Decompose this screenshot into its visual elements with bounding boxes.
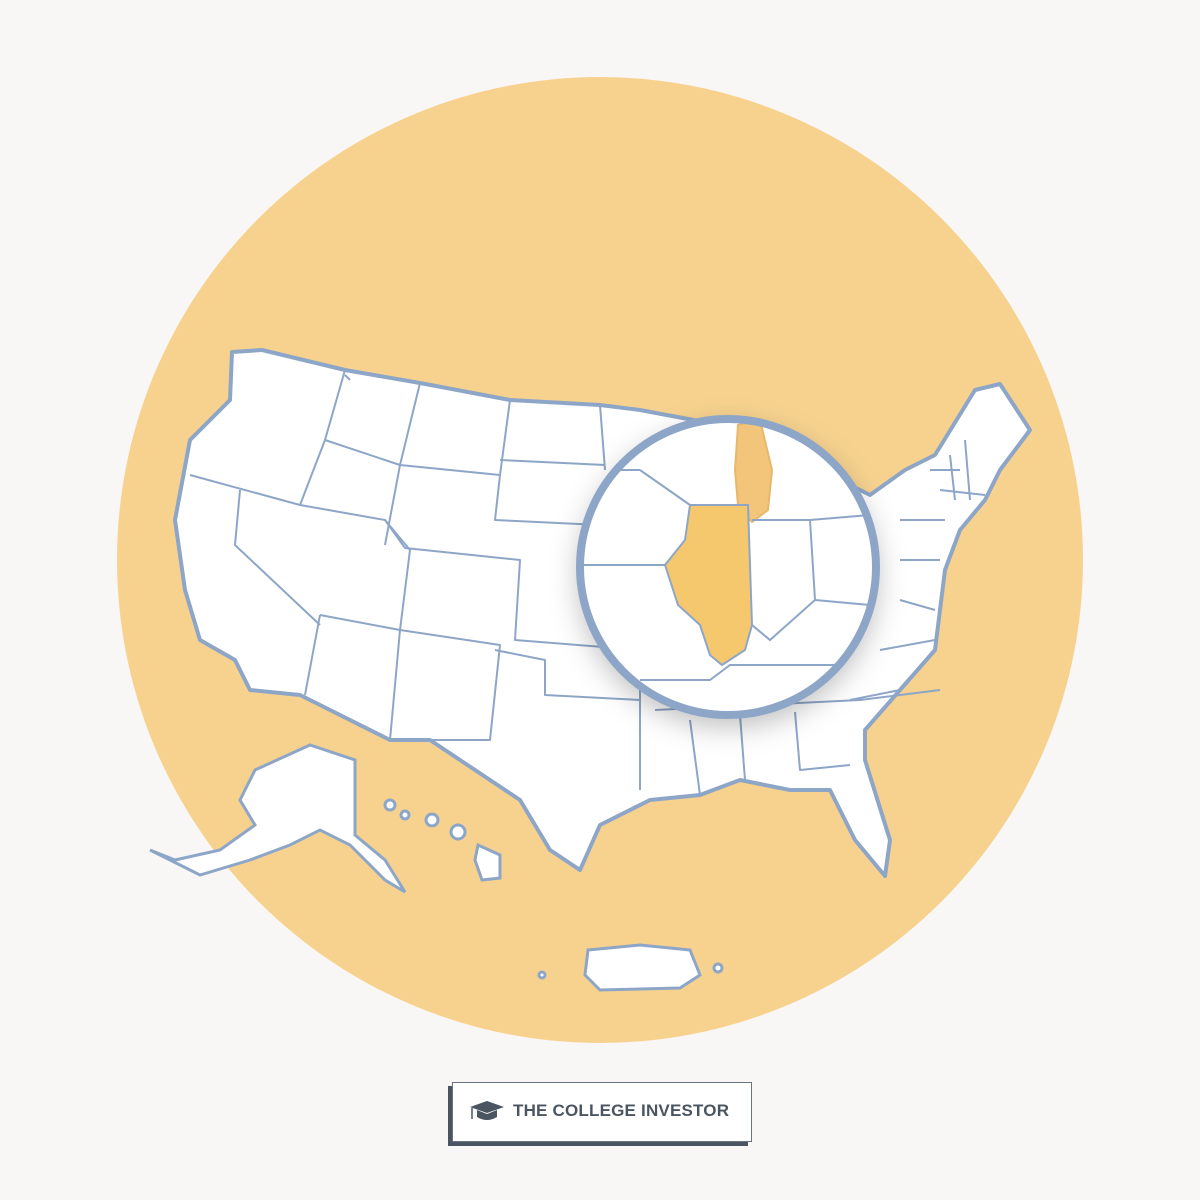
brand text: THE COLLEGE INVESTOR [513,1101,729,1120]
illinois [665,505,752,665]
hawaii [385,800,500,880]
logo [448,1082,752,1146]
icon: graduation cap [470,1101,504,1120]
background circle [117,77,1083,1043]
puerto rico [539,945,722,990]
lower 48 map [175,350,1030,876]
magnifier [578,417,878,717]
map illustration [117,77,1083,1043]
lake michigan [735,420,772,522]
alaska [150,745,405,892]
